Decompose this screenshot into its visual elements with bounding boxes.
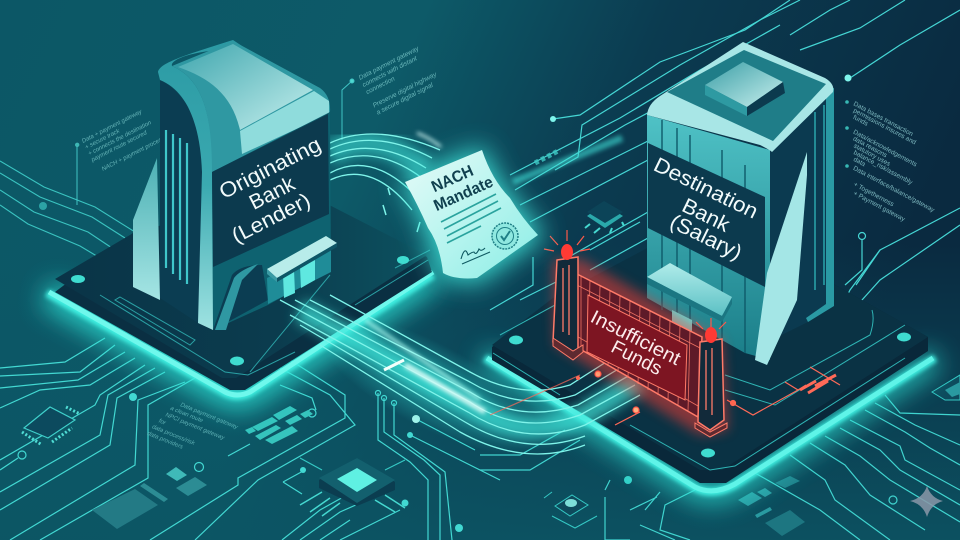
roof	[172, 41, 330, 172]
roof block	[705, 62, 785, 116]
annotation text: right: data reasons	[852, 135, 889, 160]
left post	[544, 230, 590, 360]
annotation text: right: + Togetherness	[852, 181, 896, 209]
signature	[461, 248, 490, 264]
annotation text: upper left: payment route secured	[90, 130, 149, 164]
barrier wall	[573, 272, 702, 417]
annotation text: lower left: a clean route	[169, 406, 204, 425]
annotation text: upper center: connects with distant	[361, 55, 419, 89]
annotation text: upper center: Data payment gateway	[358, 45, 421, 82]
annotation text: lower left: for	[158, 418, 167, 427]
windows	[267, 247, 331, 304]
insufficient funds barrier	[544, 230, 728, 437]
curved band	[158, 40, 245, 330]
right dark face	[745, 88, 834, 353]
awning	[267, 236, 337, 278]
annotation text: upper center: Preserve digital highway	[372, 71, 438, 109]
label: destination bank: Destination	[650, 153, 762, 224]
dark side face	[160, 80, 205, 323]
annotation text: lower left: data process/risk	[151, 424, 196, 447]
icon: sparkle watermark	[910, 486, 943, 517]
sign text: Insufficient	[587, 307, 684, 370]
circuit traces: lower right	[480, 395, 960, 540]
annotation leader: upper center	[342, 79, 354, 140]
annotation text: right: statutory uses	[852, 143, 892, 168]
red circuit lines	[490, 367, 840, 425]
annotation text: upper left: NACH + payment process	[101, 136, 166, 173]
circuit traces: lower left	[0, 338, 500, 540]
central processor chip	[300, 458, 405, 516]
annotation text: upper left	[74, 106, 166, 179]
data cells: bottom right	[738, 476, 805, 536]
sign text: Funds	[607, 337, 665, 380]
circuit blocks: lower left	[92, 467, 207, 529]
annotation text: right: + Payment gateway	[852, 190, 907, 223]
barrier glow	[553, 258, 728, 435]
circuit chip: bottom center right	[544, 492, 597, 528]
barrier grid	[573, 276, 702, 411]
label panel	[212, 114, 329, 267]
label: destination bank: (Salary)	[666, 210, 745, 265]
circuit traces: top right	[490, 0, 960, 330]
barrier sign	[587, 295, 687, 400]
document glow	[400, 146, 545, 284]
right post	[695, 318, 727, 437]
document title: Mandate	[431, 174, 496, 215]
bright data streak: upper center	[513, 138, 622, 182]
annotation text: upper left: + secure track	[84, 128, 122, 151]
label: originating bank: Bank	[246, 172, 299, 215]
label: destination bank	[650, 153, 762, 265]
annotation text: lower left: Data payment gateway	[179, 402, 239, 431]
lower window	[672, 310, 692, 345]
label panel	[648, 143, 765, 287]
lower front	[212, 112, 331, 330]
chip: right edge	[932, 375, 960, 400]
label: originating bank: Originating	[216, 133, 325, 204]
label: destination bank: Bank	[678, 194, 734, 237]
left face	[647, 115, 770, 360]
circuit traces: upper left	[0, 161, 135, 258]
right platform	[485, 215, 935, 492]
curved doorway sweep	[213, 265, 268, 330]
left pillar	[133, 158, 160, 300]
door canopy	[647, 263, 732, 316]
annotation text: right	[815, 100, 960, 234]
circuit chip: lower left	[22, 407, 80, 445]
nach mandate document	[400, 146, 545, 284]
annotation text: right: funds	[852, 114, 870, 128]
originating bank building	[133, 40, 337, 330]
annotation text: upper center: connection	[365, 75, 397, 96]
document sheet	[405, 150, 538, 278]
annotation text: right: balance_risk/assembly	[852, 149, 914, 187]
annotation text: upper center	[358, 43, 442, 117]
annotation text: lower left: NPCI payment gateway	[164, 412, 226, 442]
annotation text: right: Data bases transaction	[852, 101, 914, 138]
annotation text: right: permissions insures and	[852, 107, 917, 147]
side stripes	[166, 130, 187, 284]
left platform	[47, 190, 433, 396]
label: originating bank: (Lender)	[228, 189, 314, 248]
annotation text: right: Data interface/balance/gateway	[852, 165, 936, 214]
annotation text: lower left	[146, 395, 239, 467]
annotation text: upper left: Data + payment gateway	[81, 109, 144, 145]
destination bank building	[647, 42, 834, 365]
annotation text: lower left: data providers	[146, 431, 184, 451]
annotation text: upper center: a secure digital signal	[375, 82, 435, 117]
inner roof	[667, 50, 826, 141]
annotation text: upper left: + connects the destination	[88, 120, 153, 157]
circuit chip: upper center	[585, 201, 624, 233]
roof rim	[647, 42, 833, 152]
annotation leader: upper left	[76, 146, 78, 205]
label: originating bank	[216, 133, 325, 248]
annotation text: right: data	[852, 156, 867, 168]
seal	[492, 223, 518, 249]
light side panel	[755, 152, 807, 365]
data cells: center bottom	[245, 406, 313, 444]
document lines	[441, 194, 501, 243]
data flow ribbon: arc to mandate	[330, 133, 441, 232]
annotation text: right: Data/acknowledgements	[852, 129, 919, 169]
data flow ribbon: lower path	[280, 289, 640, 481]
document title: NACH	[429, 163, 476, 196]
